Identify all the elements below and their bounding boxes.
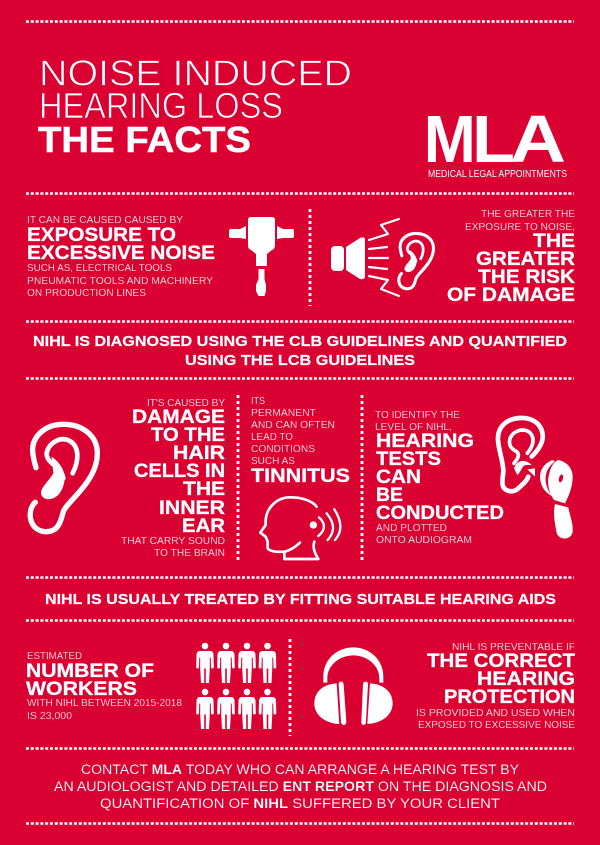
- text block: correct hearing protection: NIHL IS PREVENTABLE IF: [452, 641, 575, 653]
- text block: correct hearing protection: PROTECTION: [444, 686, 575, 708]
- call to action: CONTACT MLA TODAY WHO CAN ARRANGE A HEARING TEST BY: [81, 762, 519, 777]
- text block: tinnitus: AND CAN OFTEN: [251, 419, 335, 431]
- text block: number of workers: IS 23,000: [27, 710, 72, 722]
- text block: hearing tests: ONTO AUDIOGRAM: [376, 534, 472, 546]
- text block: damage to the hair cells: DAMAGE: [132, 406, 225, 428]
- icon: jackhammer: [229, 217, 294, 296]
- text block: correct hearing protection: HEARING: [477, 668, 575, 690]
- icon: loudspeaker and ear: [331, 219, 434, 296]
- call to action: QUANTIFICATION OF NIHL SUFFERED BY YOUR CLIENT: [100, 796, 500, 811]
- text block: tinnitus: LEAD TO: [251, 431, 293, 443]
- text block: hearing tests: CAN: [376, 466, 421, 488]
- text block: damage to the hair cells: HAIR: [173, 442, 225, 464]
- text block: the greater the risk: GREATER: [476, 248, 575, 270]
- text block: hearing tests: [375, 409, 504, 546]
- text block: tinnitus: TINNITUS: [251, 465, 350, 487]
- text block: damage to the hair cells: EAR: [182, 515, 225, 537]
- text block: hearing tests: BE: [376, 484, 403, 506]
- text block: hearing tests: TO IDENTIFY THE: [375, 409, 460, 421]
- icon: workers pictogram: [196, 643, 276, 729]
- text block: hearing tests: LEVEL OF NIHL,: [375, 421, 452, 433]
- logo: MLA: MEDICAL LEGAL APPOINTMENTS: [428, 169, 567, 180]
- text block: the greater the risk: OF DAMAGE: [447, 284, 575, 306]
- logo: MLA: A: [510, 102, 566, 177]
- text block: tinnitus: [251, 395, 350, 487]
- text block: tinnitus: SUCH AS: [251, 455, 295, 467]
- text block: tinnitus: CONDITIONS: [251, 443, 315, 455]
- text block: the greater the risk: THE RISK: [478, 266, 575, 288]
- text block: number of workers: ESTIMATED: [27, 650, 82, 662]
- logo: MLA: L: [472, 102, 515, 177]
- text block: number of workers: [26, 650, 182, 722]
- text block: exposure to excessive noise: [27, 214, 215, 299]
- text block: number of workers: WITH NIHL BETWEEN 2015-2018: [27, 697, 182, 709]
- text block: exposure to excessive noise: EXCESSIVE NOISE: [27, 242, 215, 264]
- title: [38, 52, 352, 160]
- call to action: [54, 762, 547, 811]
- text block: tinnitus: PERMANENT: [251, 407, 317, 419]
- text block: the greater the risk: THE GREATER THE: [481, 208, 575, 220]
- text block: exposure to excessive noise: PNEUMATIC TOOLS AND MACHINERY: [27, 275, 213, 287]
- text block: correct hearing protection: [416, 641, 575, 731]
- text block: tinnitus: ITS: [251, 395, 265, 407]
- title: HEARING LOSS: [39, 85, 283, 126]
- text block: hearing tests: AND PLOTTED: [376, 522, 447, 534]
- text block: damage to the hair cells: IT'S CAUSED BY: [147, 397, 225, 409]
- text block: exposure to excessive noise: IT CAN BE CAUSED CAUSED BY: [27, 214, 183, 226]
- text block: correct hearing protection: THE CORRECT: [427, 650, 575, 672]
- icon: ear defenders: [314, 647, 393, 725]
- text block: correct hearing protection: EXPOSED TO EXCESSIVE NOISE: [418, 719, 575, 731]
- text block: damage to the hair cells: CELLS IN: [134, 460, 225, 482]
- icon: large ear: [30, 424, 97, 532]
- text block: hearing tests: HEARING: [376, 430, 474, 452]
- icon: head with ringing sound: [260, 497, 340, 559]
- text block: hearing tests: TESTS: [376, 448, 441, 470]
- title: NOISE INDUCED: [39, 52, 352, 94]
- text block: the greater the risk: EXPOSURE TO NOISE,: [465, 221, 575, 233]
- logo: MLA: [424, 102, 567, 180]
- text block: the greater the risk: [447, 208, 575, 306]
- icon: ear with otoscope: [498, 418, 573, 539]
- call to action: AN AUDIOLOGIST AND DETAILED ENT REPORT ON THE DIAGNOSIS AND: [54, 779, 547, 794]
- logo: MLA: M: [424, 102, 476, 177]
- text block: exposure to excessive noise: ON PRODUCTION LINES: [27, 287, 146, 299]
- text block: damage to the hair cells: TO THE: [151, 424, 225, 446]
- text block: hearing tests: CONDUCTED: [376, 502, 504, 524]
- text block: exposure to excessive noise: EXPOSURE TO: [27, 224, 176, 246]
- text block: correct hearing protection: IS PROVIDED AND USED WHEN: [416, 707, 575, 719]
- text block: damage to the hair cells: TO THE BRAIN: [154, 547, 225, 559]
- heading: diagnosis guidelines: USING THE LCB GUIDELINES: [185, 353, 415, 369]
- text block: number of workers: NUMBER OF: [26, 660, 154, 682]
- text block: damage to the hair cells: THE: [183, 478, 225, 500]
- text block: damage to the hair cells: THAT CARRY SOUND: [121, 535, 225, 547]
- text block: the greater the risk: THE: [533, 230, 575, 252]
- heading: diagnosis guidelines: NIHL IS DIAGNOSED USING THE CLB GUIDELINES AND QUANTIFIED: [33, 334, 567, 350]
- heading: treatment: NIHL IS USUALLY TREATED BY FITTING SUITABLE HEARING AIDS: [45, 592, 556, 608]
- title: THE FACTS: [38, 119, 251, 160]
- text block: damage to the hair cells: [121, 397, 225, 559]
- text block: damage to the hair cells: INNER: [159, 497, 225, 519]
- heading: diagnosis guidelines: [33, 334, 567, 369]
- text block: number of workers: WORKERS: [26, 678, 137, 700]
- text block: exposure to excessive noise: SUCH AS, ELECTRICAL TOOLS: [27, 262, 172, 274]
